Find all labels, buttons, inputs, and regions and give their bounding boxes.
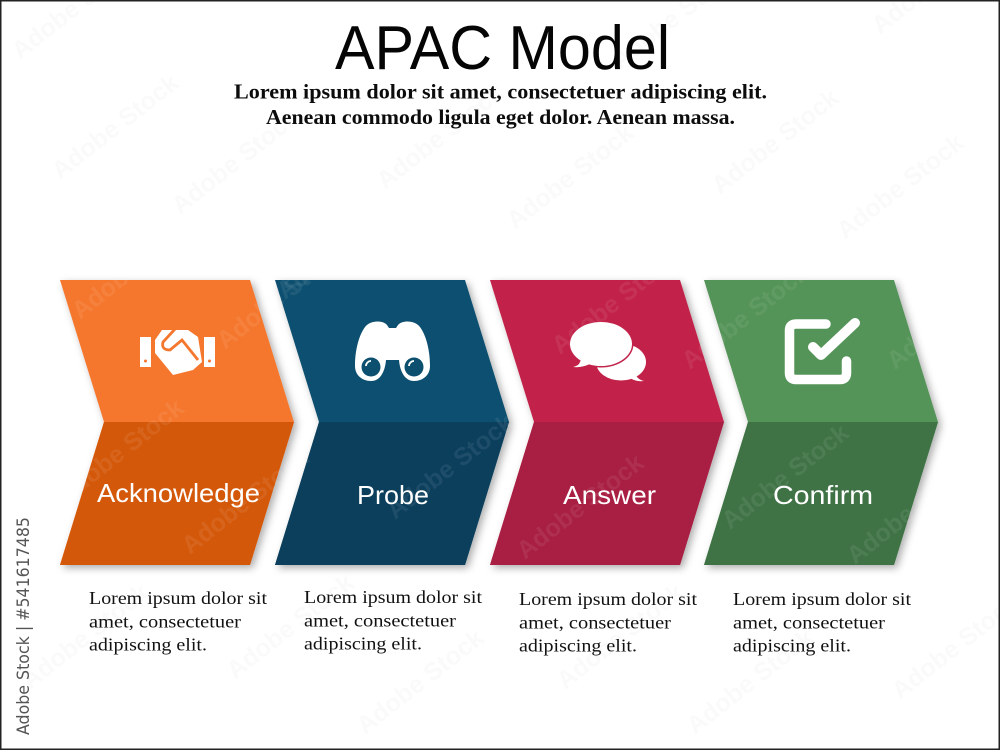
- text block: answer description: amet, consectetuer: [519, 612, 671, 632]
- text: Adobe Stock: [676, 259, 814, 375]
- text block: answer description: Lorem ipsum dolor sit: [519, 589, 697, 609]
- text block: acknowledge description: [89, 588, 267, 654]
- text: Adobe Stock: [381, 409, 519, 525]
- text block: confirm description: adipiscing elit.: [733, 636, 851, 656]
- text: Adobe Stock: [706, 84, 844, 200]
- text: Adobe Stock: [841, 454, 979, 570]
- text block: answer description: [519, 589, 697, 656]
- text block: probe description: adipiscing elit.: [304, 634, 422, 654]
- icon: binoculars: [355, 321, 430, 381]
- subtitle text: Aenean commodo ligula eget dolor. Aenean massa.: [266, 105, 735, 129]
- text: Adobe Stock: [221, 569, 359, 685]
- text: Adobe Stock: [546, 244, 684, 360]
- text: Adobe Stock: [351, 624, 489, 740]
- text block: probe description: amet, consectetuer: [304, 610, 456, 630]
- title: APAC Model: [335, 14, 670, 83]
- panel: probe chevron: [275, 280, 509, 565]
- text: Adobe Stock: [66, 209, 204, 325]
- label: Answer: Answer: [563, 480, 656, 510]
- subtitle text: [234, 80, 767, 129]
- text: Adobe Stock: [371, 79, 509, 195]
- text: Adobe Stock: [551, 579, 689, 695]
- icon: handshake: [140, 329, 215, 375]
- text block: probe description: Lorem ipsum dolor sit: [304, 587, 482, 607]
- label: Confirm: Confirm: [773, 480, 873, 510]
- text: Adobe Stock: [46, 69, 184, 185]
- text: Adobe Stock: [16, 579, 154, 695]
- text block: acknowledge description: Lorem ipsum dolor sit: [89, 588, 267, 608]
- label: Acknowledge: Acknowledge: [97, 478, 260, 508]
- icon: checkbox: [790, 323, 855, 380]
- text: Adobe Stock: [176, 444, 314, 560]
- text: Adobe Stock: [511, 449, 649, 565]
- panel: answer chevron: [490, 280, 724, 565]
- icon: speech bubbles: [568, 320, 646, 381]
- text: Adobe Stock: [501, 119, 639, 235]
- panel: acknowledge chevron: [60, 280, 294, 565]
- text: Adobe Stock: [51, 394, 189, 510]
- label: Probe: Probe: [357, 480, 429, 510]
- text: Adobe Stock: [831, 129, 969, 245]
- text block: probe description: [304, 587, 482, 654]
- text: Adobe Stock: [271, 189, 409, 305]
- watermark: stock id: Adobe Stock | #541617485: [14, 517, 34, 735]
- text block: confirm description: Lorem ipsum dolor sit: [733, 589, 911, 609]
- panel: confirm chevron: [704, 280, 938, 565]
- text: Adobe Stock: [681, 624, 819, 740]
- text block: acknowledge description: adipiscing elit.: [89, 634, 207, 654]
- text: Adobe Stock: [211, 239, 349, 355]
- text block: acknowledge description: amet, consectetuer: [89, 612, 241, 632]
- text: Adobe Stock: [166, 104, 304, 220]
- text block: answer description: adipiscing elit.: [519, 636, 637, 656]
- text block: confirm description: [733, 589, 911, 656]
- text block: confirm description: amet, consectetuer: [733, 612, 885, 632]
- text: Adobe Stock: [716, 419, 854, 535]
- subtitle text: Lorem ipsum dolor sit amet, consectetuer adipiscing elit.: [234, 80, 767, 104]
